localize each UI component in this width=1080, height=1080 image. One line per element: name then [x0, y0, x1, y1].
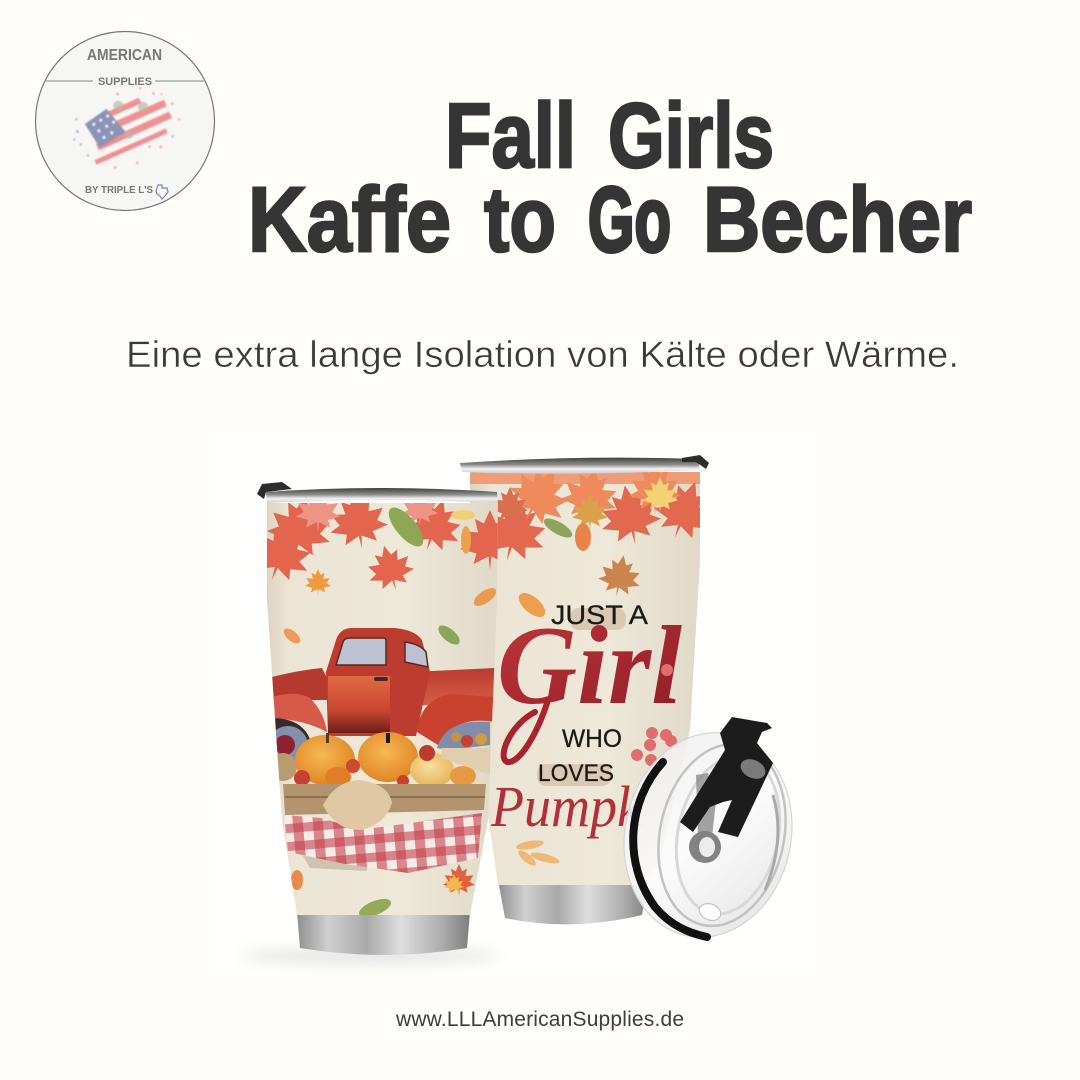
truck cab: [326, 628, 430, 736]
lid black gasket: [633, 762, 707, 937]
logo badge: [36, 32, 214, 210]
right tumbler lid rim: [460, 458, 700, 474]
truck hood: [272, 668, 328, 700]
left tumbler white pumpkin: [323, 780, 392, 830]
truck door handle: [374, 677, 388, 681]
subtitle: Eine extra lange Isolation von Kälte oder Wärme.: [126, 334, 959, 375]
left tumbler pumpkins: [269, 732, 490, 787]
right tumbler label: highlight swashes: [570, 608, 626, 630]
left tumbler: [257, 482, 498, 955]
truck rear fender: [417, 694, 495, 745]
right tumbler leaves: [470, 472, 700, 617]
right tumbler base: [498, 880, 648, 924]
logo text: American: AMERICAN: [87, 47, 162, 64]
right tumbler label: Pumpkin: Pumpk: [490, 774, 642, 839]
left tumbler small leaves: [291, 864, 475, 915]
left tumbler leaves: [267, 503, 498, 644]
title line 1: [445, 85, 774, 187]
truck front fender: [272, 694, 327, 732]
logo text: By Triple L's: BY TRIPLE L'S: [85, 185, 153, 196]
left tumbler gingham cloth: [284, 813, 482, 873]
truck wheels: [268, 722, 490, 766]
lid grey hinge strip: [696, 773, 716, 838]
logo text: Supplies: SUPPLIES: [98, 76, 152, 88]
logo flag: [63, 74, 190, 184]
title line 2: Go: [588, 169, 671, 271]
footer url: www.LLLAmericanSupplies.de: [395, 1008, 684, 1031]
left tumbler base: [297, 912, 470, 955]
lid disc: [605, 717, 811, 953]
truck door: [328, 676, 390, 733]
right tumbler body: [470, 472, 700, 885]
truck windows: [336, 638, 386, 665]
right tumbler label: Girl: Girl: [497, 604, 682, 728]
product photo: [249, 455, 792, 968]
title line 1: Girls: [608, 85, 774, 187]
right tumbler label: Loves: LOVES: [538, 760, 614, 787]
left tumbler truck: [268, 628, 495, 766]
loose lid: [605, 717, 811, 953]
shadow: [240, 948, 500, 964]
title line 2: to: [484, 169, 556, 271]
right tumbler sprig: [516, 840, 560, 866]
right tumbler: [460, 454, 723, 924]
right tumbler label: Girl: [500, 625, 682, 766]
right tumbler label: Just a: JUST A: [551, 600, 648, 630]
lid vent hole: [697, 901, 723, 923]
title line 1: Fall: [445, 85, 576, 187]
lid drinking hole: [689, 831, 721, 863]
right tumbler lid tab: [682, 455, 709, 469]
title line 2: [248, 169, 972, 271]
crate of apples: [442, 748, 490, 775]
lid black flip handle: [680, 717, 773, 837]
title: [248, 85, 972, 271]
logo Texas icon: [156, 185, 168, 199]
left tumbler lid tab: [257, 482, 292, 499]
left tumbler body: [267, 503, 498, 915]
right tumbler berries: [631, 664, 677, 766]
title line 2: Kaffe: [248, 169, 451, 271]
right tumbler label: Who: WHO: [562, 725, 622, 753]
lid rings: [642, 732, 802, 938]
truck bed: [422, 668, 494, 705]
title line 2: Becher: [703, 169, 972, 271]
left tumbler wooden crate: [283, 784, 486, 815]
left tumbler lid rim: [266, 488, 498, 503]
